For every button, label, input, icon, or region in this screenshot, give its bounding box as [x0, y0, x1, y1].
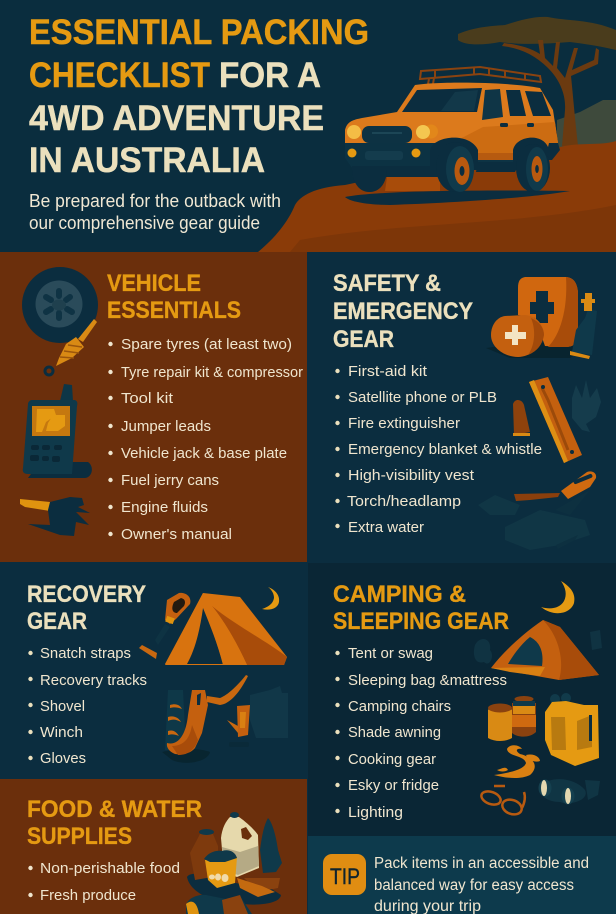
checklist: Extra water	[348, 519, 424, 536]
checklist: High-visibility vest	[348, 467, 475, 484]
subtitle: Be prepared for the outback with	[29, 191, 281, 211]
panel: safety and emergency gear	[308, 252, 616, 562]
checklist: Cooking gear	[348, 751, 436, 768]
front bumper	[345, 143, 450, 168]
checklist	[335, 363, 542, 536]
ground shadow	[187, 874, 281, 905]
heading	[27, 581, 146, 635]
icon: lanterns	[538, 779, 600, 804]
checklist: Non-perishable food	[40, 860, 180, 877]
checklist: Owner's manual	[121, 526, 232, 543]
icon: glasses	[480, 786, 525, 817]
tyre: front right	[436, 142, 474, 192]
boot	[186, 895, 252, 914]
illustration: distant hill	[557, 100, 616, 148]
body	[345, 83, 558, 162]
food tin	[205, 857, 237, 888]
checklist: Snatch straps	[40, 645, 131, 662]
indicator lights	[348, 148, 356, 158]
icon: food and water pile	[186, 812, 282, 914]
checklist: Torch/headlamp	[347, 493, 461, 510]
illustration: red dirt hill	[258, 141, 616, 252]
checklist: Recovery tracks	[40, 672, 147, 689]
title: FOR A	[219, 56, 321, 95]
panel: tip	[308, 836, 616, 914]
title: 4WD ADVENTURE	[29, 99, 324, 138]
icon: crescent moon	[541, 581, 574, 613]
tyre: rear	[516, 144, 550, 192]
icon: faded glove	[572, 380, 601, 432]
illustration: car shadow	[345, 191, 570, 205]
undercarriage	[352, 166, 445, 177]
bottle	[572, 309, 597, 355]
checklist: Fresh produce	[40, 887, 136, 904]
heading: GEAR	[333, 326, 394, 353]
tip text: balanced way for easy access	[374, 877, 574, 894]
checklist: Shovel	[40, 698, 85, 715]
icon: faded bushes	[474, 630, 602, 664]
checklist: Jumper leads	[121, 418, 211, 435]
checklist: Engine fluids	[121, 499, 208, 516]
title: CHECKLIST	[29, 56, 210, 95]
icon: crescent moon	[262, 587, 279, 610]
rear bumper edge	[545, 143, 560, 160]
heading: FOOD & WATER	[27, 796, 202, 823]
wood logs	[244, 878, 280, 892]
icon: dome tent	[491, 620, 599, 680]
icon: tyre repair tool	[45, 319, 97, 375]
heading	[107, 270, 241, 324]
heading: SAFETY &	[333, 270, 441, 297]
lower sill	[478, 156, 548, 165]
heading: SLEEPING GEAR	[333, 608, 509, 635]
icon: faded bag	[250, 686, 288, 738]
icon: jerry can	[545, 693, 599, 766]
checklist: Satellite phone or PLB	[348, 389, 497, 406]
icon: cooking canisters	[488, 696, 536, 741]
heading: EMERGENCY	[333, 298, 473, 325]
checklist: Shade awning	[348, 724, 441, 741]
checklist: Tool kit	[121, 390, 174, 407]
subtitle	[29, 191, 281, 233]
panel: food and water supplies	[0, 779, 307, 914]
panel: camping and sleeping gear	[308, 563, 616, 836]
icon: gloves and torch	[20, 497, 90, 536]
icon: tent	[165, 593, 287, 665]
windows	[402, 88, 482, 112]
title: ESSENTIAL PACKING	[29, 13, 369, 52]
checklist: Tyre repair kit & compressor	[121, 364, 303, 381]
checklist: Spare tyres (at least two)	[121, 336, 292, 353]
icon: tip badge: TIP	[330, 864, 360, 889]
door handles	[500, 123, 508, 127]
checklist: Sleeping bag &mattress	[348, 672, 507, 689]
heading: SUPPLIES	[27, 823, 132, 850]
tip text	[374, 855, 589, 914]
checklist: Esky or fridge	[348, 777, 439, 794]
dark bottle	[190, 834, 218, 880]
icon: satellite handset	[23, 384, 92, 478]
checklist: Lighting	[348, 804, 403, 821]
icon: recovery tracks block	[227, 705, 250, 747]
panel: header	[0, 0, 616, 252]
headlights	[424, 124, 438, 138]
icon: recovery boots and shovel	[162, 675, 248, 763]
checklist	[28, 645, 147, 767]
title: IN AUSTRALIA	[29, 141, 265, 180]
checklist: Emergency blanket & whistle	[348, 441, 542, 458]
heading	[27, 796, 202, 850]
heading: CAMPING &	[333, 581, 466, 608]
heading: GEAR	[27, 608, 87, 635]
title	[29, 13, 369, 180]
panel: recovery gear	[0, 563, 307, 779]
bush	[260, 818, 282, 873]
checklist: Fuel jerry cans	[121, 472, 219, 489]
checklist	[335, 645, 507, 821]
icon: campfire swirl	[494, 745, 540, 778]
panel: vehicle essentials	[0, 252, 307, 562]
checklist: Camping chairs	[348, 698, 451, 715]
wheel arches	[430, 138, 478, 170]
heading: VEHICLE	[107, 270, 201, 297]
water jug	[221, 817, 259, 877]
icon: trowel and gloves	[478, 471, 596, 550]
checklist	[28, 860, 180, 904]
checklist: Winch	[40, 724, 83, 741]
tip text: Pack items in an accessible and	[374, 855, 589, 872]
illustration: 4WD vehicle	[345, 67, 560, 192]
checklist: Vehicle jack & base plate	[121, 445, 287, 462]
checklist: First-aid kit	[348, 363, 428, 380]
icon: torch and strap	[139, 593, 190, 659]
checklist: Fire extinguisher	[348, 415, 460, 432]
subtitle: our comprehensive gear guide	[29, 213, 260, 233]
tyre: front left	[352, 170, 387, 192]
icon: first-aid kits	[486, 277, 597, 359]
roof rack	[420, 67, 541, 84]
checklist: Tent or swag	[348, 645, 433, 662]
checklist	[108, 336, 303, 543]
heading	[333, 270, 473, 353]
grille	[362, 126, 412, 143]
heading: ESSENTIALS	[107, 297, 241, 324]
heading: RECOVERY	[27, 581, 146, 608]
icon: hi-vis brush	[513, 377, 582, 463]
icon: spare tyre	[22, 267, 98, 343]
icon: tip badge	[323, 854, 366, 895]
illustration: acacia tree	[458, 17, 616, 146]
checklist: Gloves	[40, 750, 86, 767]
heading	[333, 581, 509, 635]
